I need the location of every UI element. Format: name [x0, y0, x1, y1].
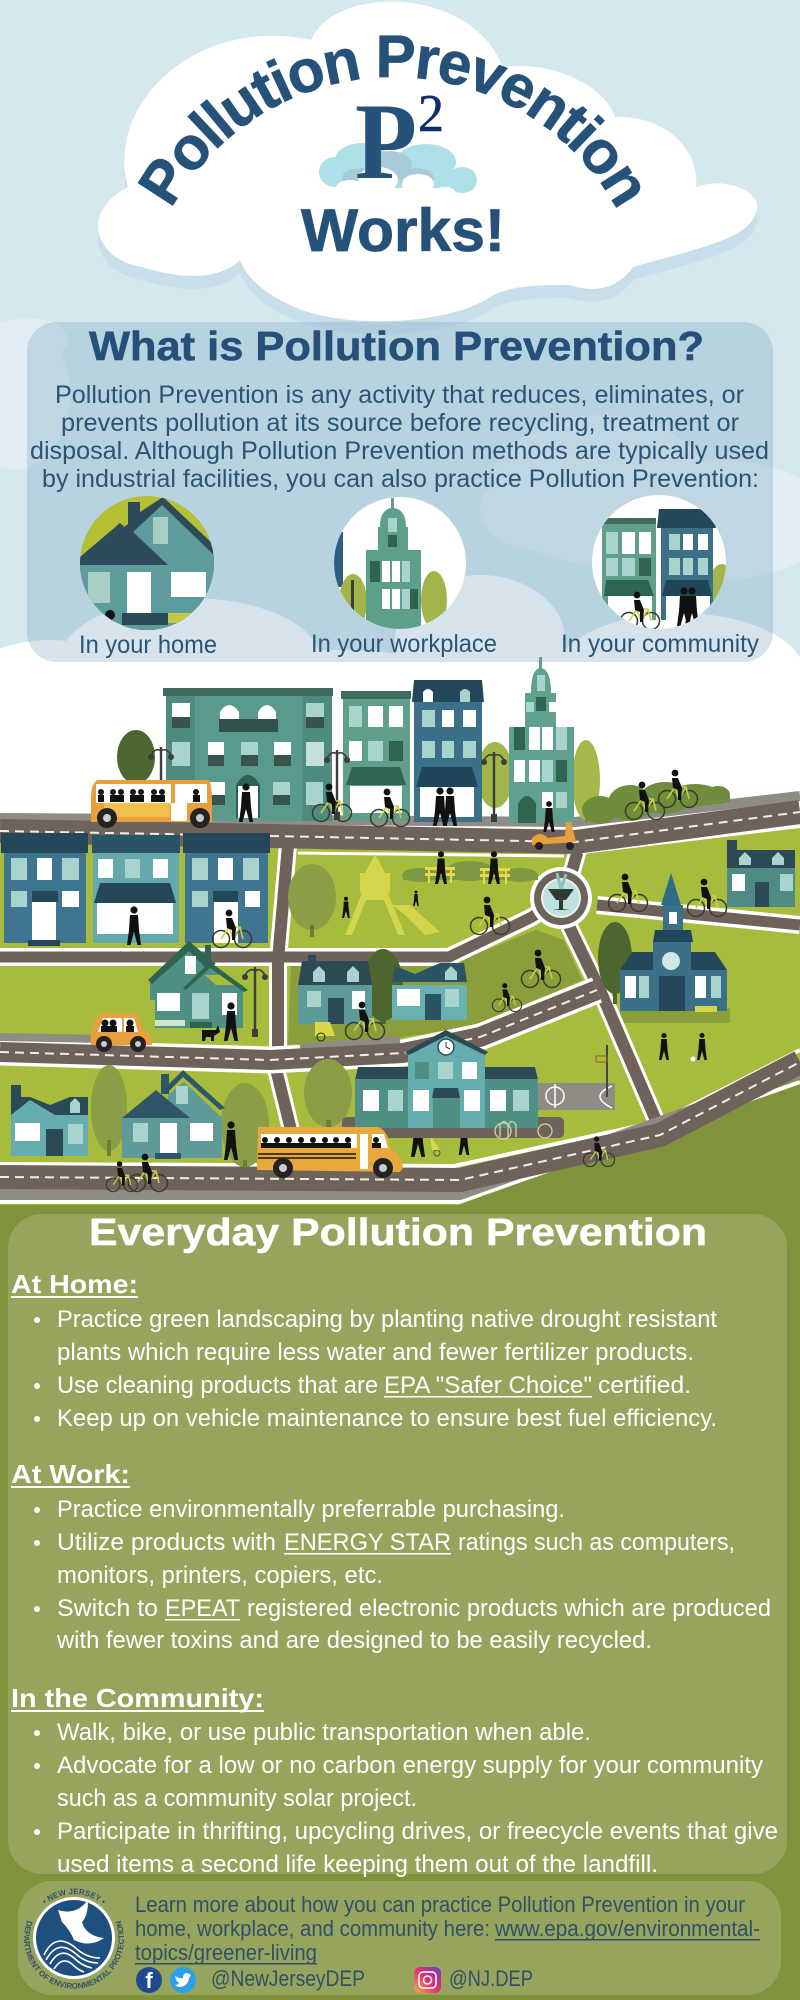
title: Pollution Prevention arc: Pollution Prevention — [138, 35, 640, 208]
school building with court — [304, 1030, 615, 1139]
icon: twitter — [170, 1967, 196, 1993]
white village sky — [0, 664, 800, 840]
people and cyclists on upper street — [239, 770, 698, 826]
section: at work — [11, 1459, 771, 1654]
icon: facebook — [136, 1967, 162, 1993]
kids and bottom road cyclists — [106, 1033, 707, 1192]
left green house — [148, 941, 248, 1028]
cyclist with trailer and hill cyclists — [315, 950, 560, 1041]
section: in the community: Participate in thrifting, upcycling drives, or freecycle events that give — [57, 1818, 778, 1845]
icon: NJDEP seal: DEPARTMENT OF ENVIRONMENTAL PROTECTION — [24, 1920, 124, 1989]
scooter — [532, 801, 576, 850]
section: at work: monitors, printers, copiers, etc. — [57, 1562, 383, 1589]
icon: instagram — [414, 1967, 441, 1993]
icon: facebook: f — [145, 1968, 153, 1993]
yellow school bus — [257, 1127, 403, 1178]
section: in the community: Advocate for a low or no carbon energy supply for your community — [57, 1752, 763, 1779]
footer text: www.epa.gov/environmental- — [494, 1916, 760, 1941]
section: at home: certified. — [598, 1372, 691, 1399]
clock tower building — [509, 657, 574, 823]
section: in the community: used items a second life keeping them out of the landfill. — [57, 1851, 658, 1878]
section: at work: with fewer toxins and are designed to be easily recycled. — [56, 1627, 652, 1654]
icon: workplace circle — [334, 497, 466, 630]
fountain — [530, 867, 592, 929]
icon: NJDEP seal: • NEW JERSEY • — [43, 1888, 105, 1903]
green shop building — [341, 691, 411, 821]
definition paragraph: disposal. Although Pollution Prevention methods are typically used — [30, 437, 769, 465]
definition paragraph: by industrial facilities, you can also practice Pollution Prevention: — [42, 465, 759, 493]
icon: community circle — [592, 495, 736, 630]
handle: NewJerseyDEP: @NewJerseyDEP — [211, 1966, 365, 1991]
blue shop building — [412, 680, 484, 822]
lower left houses and trees — [11, 1065, 269, 1168]
back street trees and bushes — [117, 730, 730, 824]
section: at home: At Home: — [11, 1269, 138, 1299]
main title cloud — [98, 2, 757, 334]
people near row houses — [127, 906, 252, 948]
lawns — [0, 810, 800, 1205]
right side house — [727, 840, 795, 907]
icon: NJDEP seal — [24, 1888, 124, 1989]
park with playground and benches — [288, 851, 538, 937]
center neighbourhood houses — [298, 949, 467, 1024]
panel: everyday pollution prevention — [8, 1212, 787, 1878]
label: in your community: In your community — [561, 630, 759, 658]
cyclists by fountain road — [608, 874, 726, 916]
section: at work: EPEAT — [165, 1595, 240, 1622]
section: in the community: such as a community solar project. — [57, 1785, 417, 1812]
section: in the community: Walk, bike, or use public transportation when able. — [57, 1719, 591, 1746]
title: Works!: Works! — [301, 197, 505, 264]
section: at work: registered electronic products which are produced — [247, 1595, 771, 1622]
section: at work: Practice environmentally preferrable purchasing. — [57, 1496, 565, 1523]
page ground — [0, 1190, 800, 2000]
panel: what is pollution prevention — [27, 322, 773, 662]
section: in the community: In the Community: — [11, 1683, 264, 1713]
city bus — [91, 780, 212, 828]
section: at work: At Work: — [11, 1459, 130, 1489]
handle: NJ.DEP: @NJ.DEP — [449, 1966, 533, 1991]
orange car — [91, 1013, 152, 1052]
section: at home — [11, 1269, 717, 1432]
definition paragraph: prevents pollution at its source before recycling, treatment or — [61, 409, 739, 437]
footer text: topics/greener-living — [135, 1940, 317, 1965]
pedestrians near school — [224, 1118, 469, 1160]
section: at work: Switch to — [57, 1595, 158, 1622]
footer text: home, workplace, and community here: — [135, 1916, 490, 1941]
definition paragraph: Pollution Prevention is any activity that reduces, eliminates, or — [55, 381, 744, 409]
heading: everyday pollution prevention: Everyday Pollution Prevention — [89, 1212, 707, 1254]
P2 logo: P — [355, 81, 417, 202]
sky background — [0, 0, 800, 670]
village illustration — [0, 657, 800, 1205]
large apartment building — [163, 688, 333, 821]
icon: home circle — [80, 496, 214, 630]
heading: what is pollution prevention: What is Pollution Prevention? — [89, 323, 704, 369]
footer text — [135, 1892, 760, 1965]
footer text: Learn more about how you can practice Pollution Prevention in your — [135, 1892, 745, 1917]
street lamps — [148, 747, 507, 1037]
P2 logo — [319, 81, 477, 202]
section: at home: Use cleaning products that are — [57, 1372, 378, 1399]
P2 logo: 2 — [418, 85, 444, 143]
person walking dog — [202, 1002, 238, 1041]
section: at work: ratings such as computers, — [458, 1529, 735, 1556]
background clouds — [0, 318, 800, 737]
row houses — [1, 833, 270, 946]
section: at home: EPA "Safer Choice" — [384, 1372, 592, 1399]
section: at home: Practice green landscaping by planting native drought resistant — [57, 1306, 717, 1333]
section: at home: plants which require less water and fewer fertilizer products. — [57, 1339, 694, 1366]
label: in your workplace: In your workplace — [311, 630, 497, 658]
section: at home: Keep up on vehicle maintenance to ensure best fuel efficiency. — [57, 1405, 717, 1432]
church — [598, 873, 727, 1012]
section: at work: Utilize products with — [57, 1529, 276, 1556]
section: at work: ENERGY STAR — [284, 1529, 451, 1556]
label: in your home: In your home — [79, 631, 217, 659]
section: in the community — [11, 1683, 778, 1878]
definition paragraph — [30, 381, 769, 493]
roads — [0, 796, 800, 1202]
panel: footer — [18, 1881, 781, 1995]
